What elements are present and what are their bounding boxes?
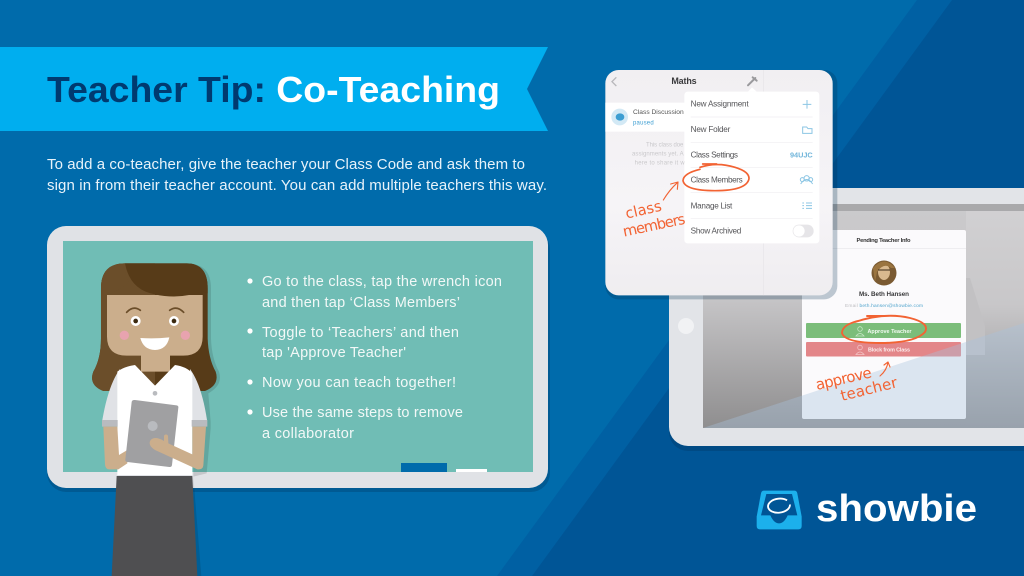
teacher character [92,263,220,576]
block button [806,342,961,356]
class members handwritten note: class [624,198,663,223]
screen reflection [703,323,1024,428]
empty-state text [632,143,685,166]
bullet list [247,274,502,442]
front tablet: class menu [605,70,837,299]
showbie logo [757,488,977,530]
approve teacher handwritten note: approve [814,364,873,394]
character shadow [187,263,220,576]
menu labels: Class Settings [691,150,738,159]
board chalk [456,469,487,472]
intro text: To add a co-teacher, give the teacher your Class Code and ask them to [47,156,525,173]
bullet list: a collaborator [262,426,354,442]
menu labels: Show Archived [691,226,742,235]
class discussion row: paused [633,121,654,127]
approve teacher handwritten note: teacher [839,373,900,405]
tablet prop [125,400,178,467]
bullet list: and then tap ‘Class Members’ [262,295,460,311]
class discussion row [605,103,685,132]
icon: wrench [748,77,757,85]
class members handwritten note [621,198,687,241]
shirt button [153,391,157,396]
class members circle annotation [683,164,749,191]
hair back [92,263,217,391]
empty-state text: here to share it w [635,160,685,166]
approve teacher handwritten note [814,364,900,405]
approve button: Approve Teacher [868,329,912,335]
toggle [793,225,814,237]
back tablet: pending teacher info [669,188,1024,451]
intro text: sign in from their teacher account. You can add multiple teachers this way. [47,177,547,194]
home button [678,318,694,334]
bullet list: Go to the class, tap the wrench icon [262,274,502,290]
title text: Teacher Tip: Co-Teaching [47,69,500,110]
face and neck [107,295,203,372]
empty-state text: This class doe [646,143,684,149]
board eraser [401,463,447,472]
smile [140,337,169,350]
shirt [117,365,192,475]
hair fringe [125,263,208,297]
block button: Block from Class [868,348,910,354]
menu labels: Class Members [691,176,743,185]
menu popover [684,87,819,243]
empty-state text: assignments yet. A [632,152,684,158]
eyes [131,316,179,326]
menu labels [691,100,749,235]
icon: inbox tray [757,491,802,529]
menu icons [800,100,813,208]
whiteboard panel [47,226,550,492]
card heading: Pending Teacher Info [856,238,911,244]
teacher email: Email beth.hansen@showbie.com [845,303,923,309]
menu labels: New Assignment [691,100,749,109]
wordmark: showbie [816,488,977,530]
class discussion row: Class Discussion [633,109,684,116]
class members arrow [663,182,678,200]
header title: Maths [671,76,697,86]
menu labels: New Folder [691,125,731,134]
cheeks [120,331,190,340]
bullet list: Toggle to ‘Teachers’ and then [262,325,459,341]
header back chevron [612,77,616,86]
right arm [150,427,206,469]
bullet list: Now you can teach together! [262,375,456,391]
bullet list: tap 'Approve Teacher' [262,345,406,361]
sleeves [102,369,120,420]
left arm [103,427,127,469]
eyebrows [127,308,184,312]
approve teacher arrow [880,362,890,376]
approve teacher circle annotation [842,316,926,343]
class code: 94UJC [790,150,813,159]
tablet screen [703,204,1024,428]
intro text [47,156,547,194]
avatar [872,260,896,286]
bullet list: Use the same steps to remove [262,405,463,421]
menu labels: Manage List [691,201,733,210]
pending teacher card [802,230,966,419]
skirt [112,476,197,576]
title banner [0,47,548,131]
cuffs [102,420,207,427]
class members handwritten note: members [621,211,687,241]
approve button [806,323,961,338]
teacher name: Ms. Beth Hansen [859,291,909,298]
